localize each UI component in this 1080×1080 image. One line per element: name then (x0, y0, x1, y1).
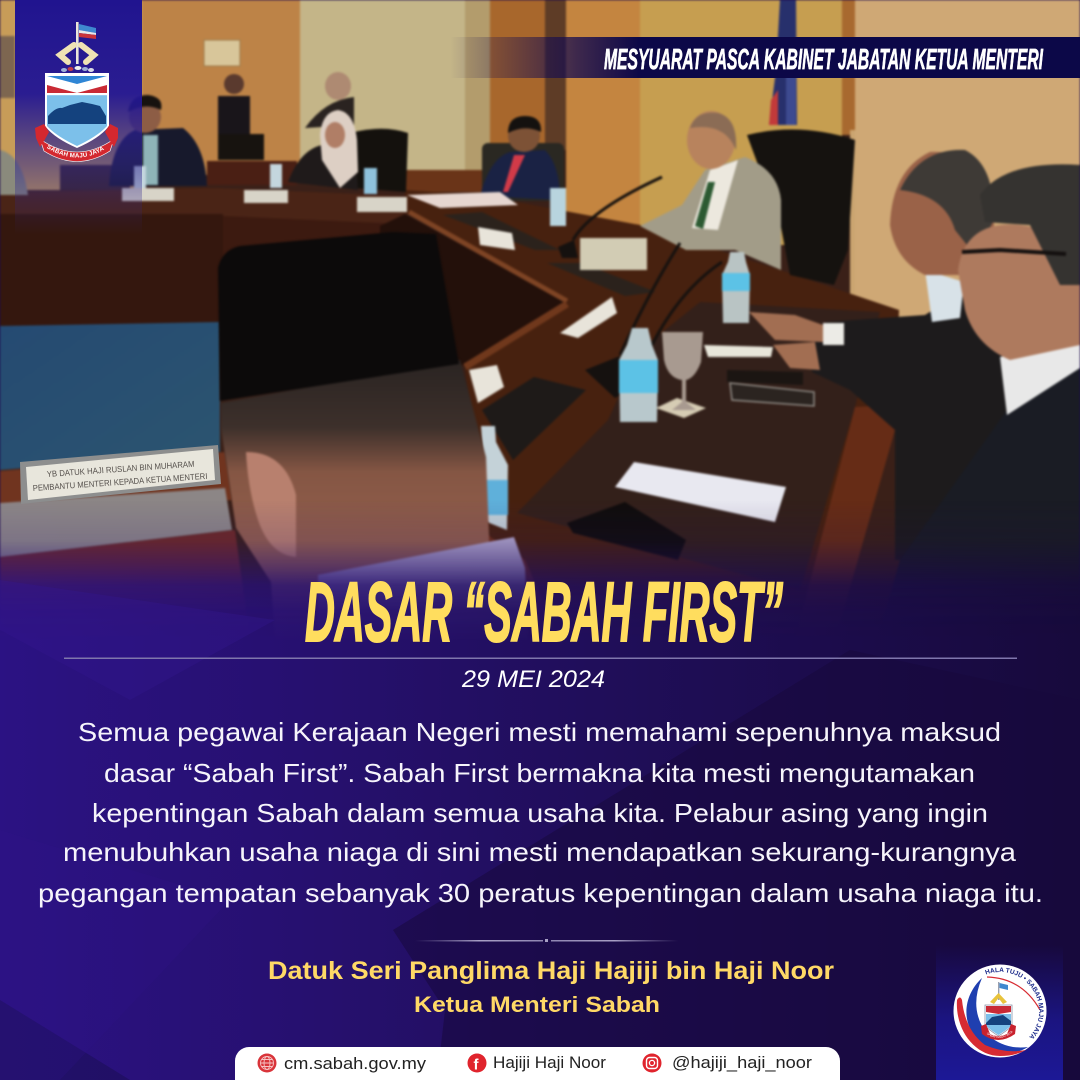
bottle small far (550, 188, 566, 226)
body paragraph: pegangan tempatan sebanyak 30 peratus kepentingan dalam usaha niaga itu. (38, 878, 1043, 908)
papers (407, 192, 518, 208)
phones (567, 370, 814, 560)
icon: facebook (468, 1054, 486, 1074)
table items (122, 177, 814, 560)
mountain (48, 102, 106, 124)
contact bar (235, 1047, 840, 1080)
name plate: Ruslan: YB DATUK HAJI RUSLAN BIN MUHARAM (46, 459, 195, 479)
instagram text: @hajiji_haji_noor (672, 1053, 812, 1072)
person: standing woman (218, 74, 264, 160)
microphones (573, 177, 722, 355)
name plates back (122, 188, 407, 212)
carpet (0, 322, 220, 470)
songkok (218, 232, 459, 401)
title divider (64, 658, 1017, 659)
body paragraph (38, 717, 1043, 908)
person: seated woman in hijab (270, 110, 377, 194)
lower background with photo fade (0, 500, 1080, 1080)
author title: Ketua Menteri Sabah (414, 992, 660, 1017)
big paper (615, 462, 786, 522)
gap beneath table (380, 214, 567, 366)
name plate: Ruslan (20, 445, 221, 504)
bottle: centre (619, 328, 658, 422)
glass and coaster (656, 332, 706, 418)
blue panel right (936, 945, 1063, 1080)
person: far-left delegate (0, 150, 28, 195)
ring text: HALA TUJU • SABAH MAJU JAYA (985, 968, 1044, 1038)
chair (354, 129, 408, 192)
background photo: meeting room (0, 0, 1080, 640)
chair: black (747, 130, 855, 285)
foreground man from behind (218, 232, 528, 640)
man with glasses (877, 164, 1080, 640)
blue panel top left (15, 0, 142, 235)
body paragraph: menubuhkan usaha niaga di sini mesti mendapatkan sekurang-kurangnya (63, 837, 1017, 867)
shield (45, 73, 109, 148)
tissue box (580, 238, 647, 270)
man with grey hair (749, 150, 1010, 560)
arms (60, 45, 94, 62)
head and neck (221, 360, 490, 640)
front left table edge (0, 452, 232, 520)
shirt collar (318, 537, 528, 640)
author name: Datuk Seri Panglima Haji Hajiji bin Haji Noor (268, 957, 834, 985)
table pads (443, 212, 560, 250)
mic bases (558, 240, 650, 398)
right foreground men (749, 150, 1080, 640)
bottle: foreground (481, 426, 508, 530)
icon: website globe (258, 1054, 276, 1072)
body paragraph: Semua pegawai Kerajaan Negeri mesti memahami sepenuhnya maksud (78, 717, 1001, 747)
icon: instagram (642, 1054, 662, 1072)
header banner (450, 37, 1080, 78)
background facets (0, 580, 1080, 1080)
body paragraph: dasar “Sabah First”. Sabah First bermakna kita mesti mengutamakan (104, 758, 975, 788)
website text: cm.sabah.gov.my (284, 1054, 427, 1073)
near conference table (0, 190, 899, 640)
person: minister in grey suit (640, 111, 781, 270)
logo: Sabah crest (35, 22, 118, 162)
round logo: Hala Tuju (954, 964, 1046, 1058)
back wall (0, 0, 1080, 640)
name plate: Ruslan: PEMBANTU MENTERI KEPADA KETUA MENTERI (32, 471, 208, 493)
name plates near (469, 227, 617, 403)
flag (76, 22, 96, 64)
beads (61, 66, 94, 72)
malaysian flag (769, 0, 797, 125)
swoosh (966, 978, 1028, 1053)
small crest: SABAH MAJU JAYA (986, 1030, 1013, 1038)
ear (246, 452, 296, 557)
dark inset surface (517, 302, 880, 590)
facebook text: Hajiji Haji Noor (493, 1053, 606, 1072)
person: left delegate (109, 95, 207, 190)
date: 29 MEI 2024 (461, 666, 605, 693)
icon: facebook: f (474, 1056, 480, 1074)
person: delegate with red tie (480, 116, 564, 201)
people in background (0, 72, 855, 285)
signature divider (415, 939, 678, 942)
person: standing woman in hijab (305, 72, 354, 128)
small paper (704, 345, 773, 357)
body paragraph: kepentingan Sabah dalam semua usaha kita. Pelabur asing yang ingin (92, 798, 988, 828)
far conference table (0, 161, 409, 330)
bottle: right (722, 252, 750, 323)
scroll: SABAH MAJU JAYA (47, 144, 104, 158)
